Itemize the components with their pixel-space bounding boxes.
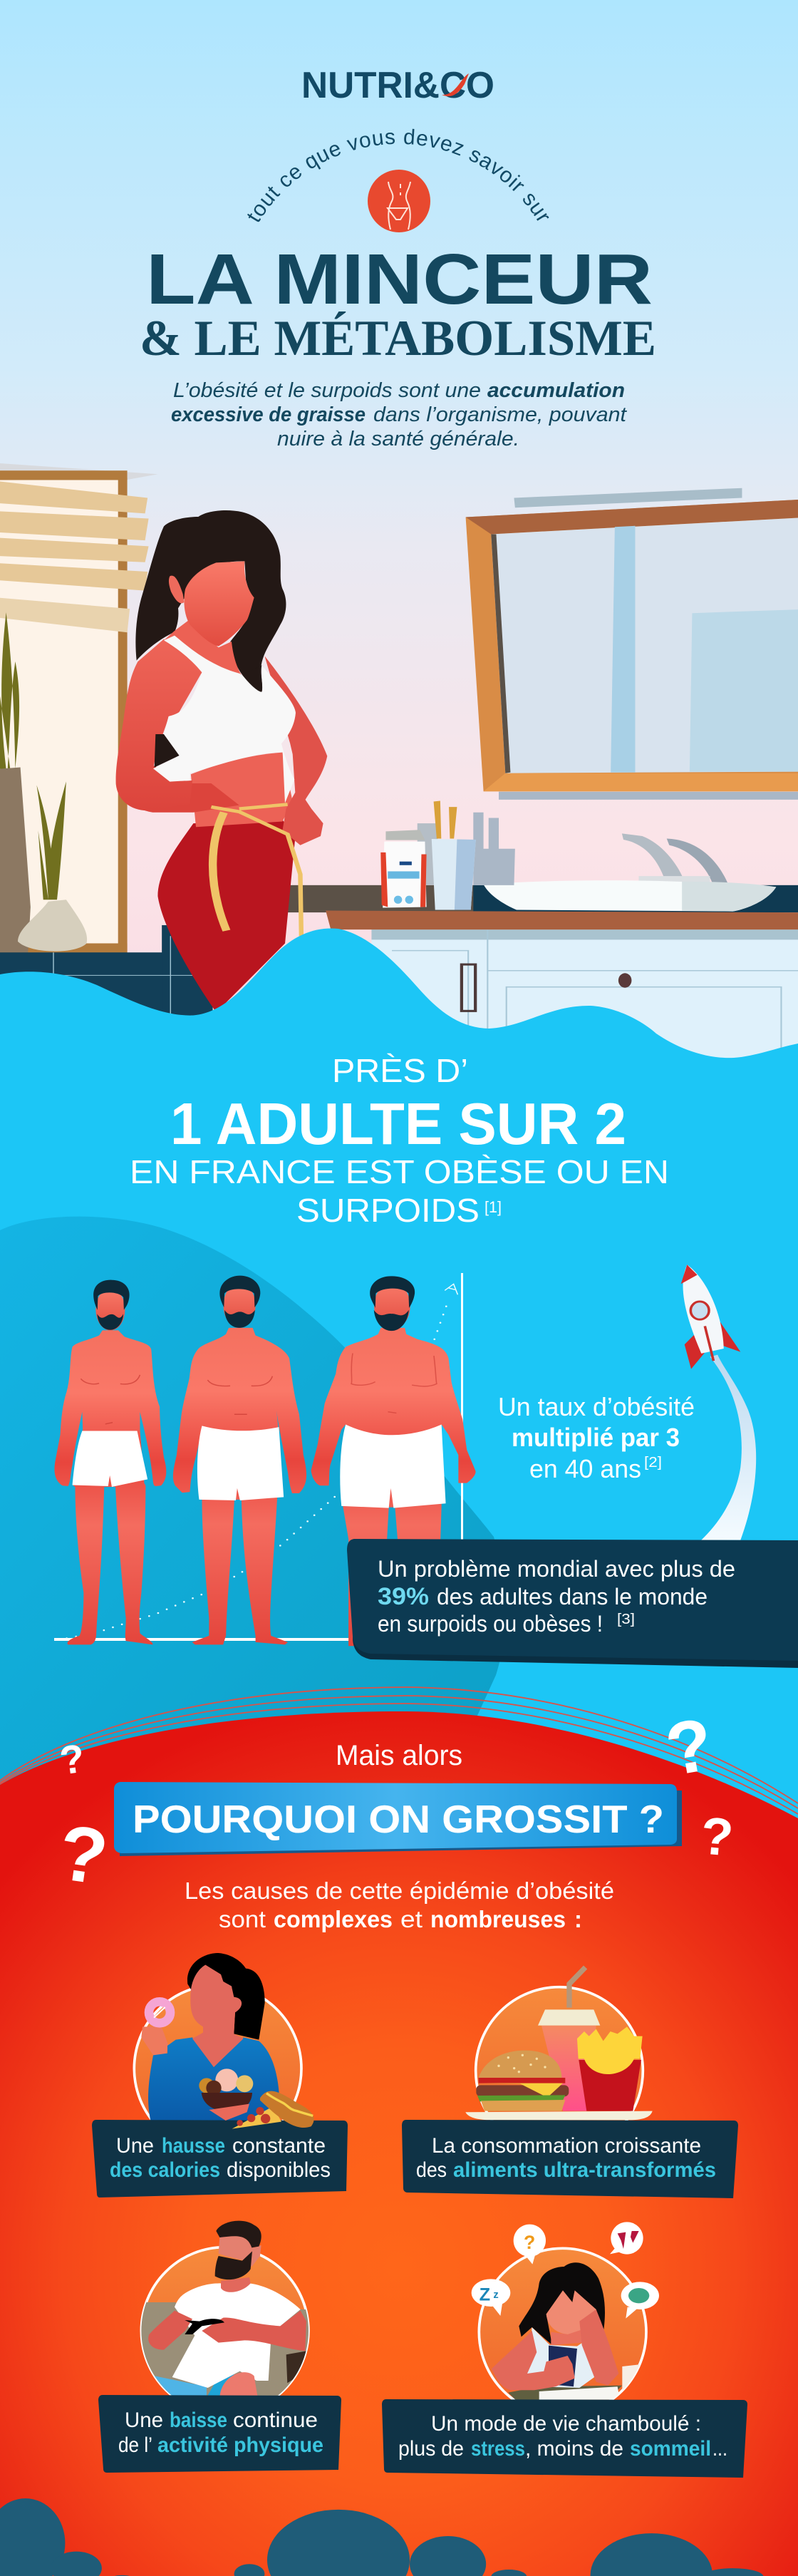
heading: statistic: SURPOIDS [296, 1192, 480, 1229]
intro text: dans l’organisme, pouvant [373, 403, 628, 426]
text: obesity rate tripled: [2] [644, 1455, 662, 1470]
card: rising calories: disponibles [227, 2158, 331, 2182]
woman body and leggings [120, 656, 327, 1012]
text: causes intro [185, 1877, 614, 1932]
speech bubbles [472, 2222, 659, 2319]
card: disrupted lifestyle: plus de [398, 2437, 464, 2461]
icon: rocket with trail [681, 1264, 756, 1540]
text: obesity rate tripled: Un taux d’obésité [498, 1392, 695, 1421]
heading: statistic: 1 ADULTE SUR 2 [170, 1091, 626, 1157]
callout: worldwide problem: en surpoids ou obèses ! [378, 1611, 603, 1637]
card: less physical activity: continue [233, 2408, 318, 2432]
question marks: ? [660, 1703, 719, 1792]
man 2 [173, 1276, 306, 1644]
background: sky and wall [0, 0, 798, 1048]
man 1 [54, 1280, 166, 1644]
heading: statistic: [1] [484, 1198, 502, 1216]
chart: body weight axes and rising dotted line [54, 1273, 463, 1641]
heading: why we gain weight: POURQUOI ON GROSSIT ? [133, 1797, 664, 1841]
man 3 [311, 1276, 476, 1646]
heading: statistic [130, 1052, 669, 1229]
speech bubbles: Z [480, 2284, 490, 2304]
text: causes intro: : [574, 1906, 582, 1932]
callout: worldwide problem: des adultes dans le monde [437, 1584, 708, 1609]
card: disrupted lifestyle: ... [712, 2437, 727, 2461]
callout: worldwide problem: 39% [378, 1583, 429, 1610]
card: less physical activity [98, 2395, 341, 2473]
heading: statistic: PRÈS D’ [332, 1052, 468, 1089]
arc subtitle: tout ce que vous devez savoir sur [247, 128, 549, 222]
illustration: burger, fries and soda [465, 1967, 653, 2154]
card: ultra-processed foods: aliments ultra-transformés [453, 2158, 716, 2182]
plants and vases [0, 612, 87, 952]
illustration: stressed woman with phone [472, 2222, 659, 2416]
illustration: three men of growing corpulence [54, 1276, 476, 1646]
card: disrupted lifestyle: sommeil [630, 2437, 711, 2461]
card: ultra-processed foods: La consommation croissante [432, 2134, 701, 2158]
card: less physical activity: baisse [170, 2408, 227, 2432]
heading: why we gain weight: Mais alors [336, 1740, 462, 1771]
intro text: excessive de graisse [171, 403, 366, 426]
card: less physical activity: Une [125, 2408, 163, 2432]
text: causes intro: et [400, 1906, 423, 1932]
callout: worldwide problem: Un problème mondial avec plus de [378, 1556, 735, 1582]
logo: NUTRI&CO [301, 65, 494, 106]
text: obesity rate tripled [498, 1392, 695, 1483]
text: obesity rate tripled: multiplié par 3 [512, 1423, 680, 1452]
card: rising calories: Une [116, 2134, 154, 2158]
clouds at the bottom [0, 2498, 763, 2576]
intro text [171, 379, 628, 450]
callout: worldwide problem [347, 1539, 798, 1668]
panel: bathroom scene [0, 463, 798, 1086]
card: disrupted lifestyle: Un mode de vie chamboulé : [431, 2412, 701, 2436]
text: causes intro: Les causes de cette épidémie d’obésité [185, 1877, 614, 1904]
measuring tape [211, 805, 301, 936]
card: ultra-processed foods: des [416, 2158, 447, 2182]
question marks: ? [57, 1735, 88, 1783]
heading: statistic: EN FRANCE EST OBÈSE OU EN [130, 1153, 669, 1190]
illustration: man playing video games [140, 2221, 309, 2416]
window with blinds [0, 463, 157, 953]
mirror [466, 488, 798, 800]
intro text: nuire à la santé générale. [277, 428, 519, 450]
intro text: accumulation [487, 379, 625, 402]
card: less physical activity: activité physique [157, 2433, 323, 2457]
title: LA MINCEUR [146, 239, 653, 319]
dark blue blob background [0, 1217, 505, 1796]
card: rising calories: constante [232, 2134, 326, 2158]
icon: bowl of donuts, pizza and hot dog [199, 2068, 314, 2129]
card: ultra-processed foods [402, 2120, 738, 2198]
card: disrupted lifestyle [382, 2399, 747, 2478]
products on the counter [380, 800, 515, 910]
question marks: ? [698, 1805, 735, 1867]
panel: blue statistics section [0, 929, 798, 1853]
callout: worldwide problem: [3] [617, 1612, 635, 1627]
panel: red causes section [0, 1711, 798, 2576]
card: disrupted lifestyle: , moins de [525, 2437, 623, 2461]
card: disrupted lifestyle: stress [471, 2437, 525, 2461]
card: rising calories: des calories [110, 2158, 220, 2182]
title [140, 239, 656, 366]
title: & LE MÉTABOLISME [140, 311, 656, 366]
sink and faucet [484, 833, 776, 912]
card: rising calories [92, 2120, 348, 2198]
speech bubbles: z [493, 2289, 499, 2301]
text: causes intro: complexes [274, 1906, 393, 1932]
intro text: L’obésité et le surpoids sont une [173, 379, 481, 402]
text: obesity rate tripled: en 40 ans [529, 1454, 641, 1483]
counter and cabinet [326, 911, 798, 1086]
woman head, hair and top [116, 510, 296, 810]
question marks [53, 1703, 735, 1902]
text: causes intro: sont [219, 1906, 266, 1932]
speech bubbles: ? [524, 2232, 535, 2253]
icon: waist in circle [368, 170, 430, 232]
floor and wall tiles [0, 885, 798, 1034]
question marks: ? [53, 1808, 113, 1902]
text: causes intro: nombreuses [430, 1906, 566, 1932]
illustration: woman eating donuts [134, 1953, 301, 2152]
card: less physical activity: de l’ [118, 2433, 152, 2457]
heading: why we gain weight [114, 1740, 682, 1856]
card: rising calories: hausse [162, 2134, 225, 2158]
